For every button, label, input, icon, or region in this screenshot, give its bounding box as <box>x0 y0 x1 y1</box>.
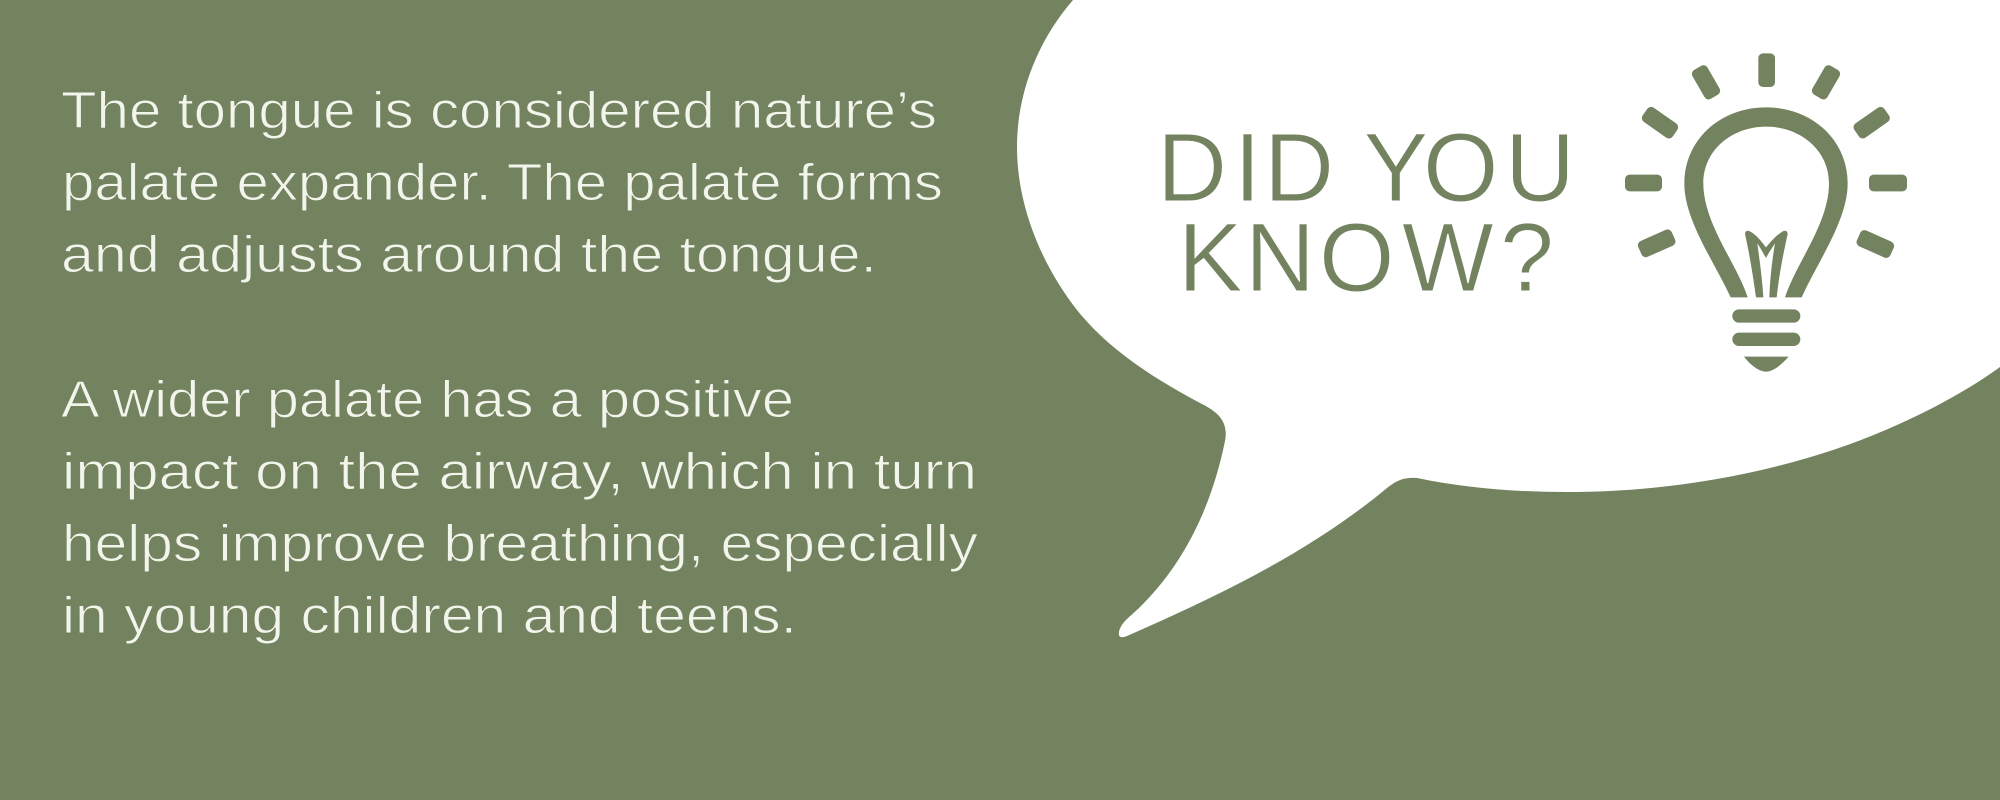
paragraph 1: palate expander. The palate forms <box>62 154 943 212</box>
paragraph 2: A wider palate has a positive <box>61 371 794 429</box>
body text <box>61 82 978 645</box>
icon: light rays <box>1625 53 1907 259</box>
did you know heading <box>1157 113 1575 312</box>
icon: bulb glass <box>1684 107 1848 297</box>
paragraph 2: impact on the airway, which in turn <box>62 443 977 501</box>
paragraph 1 <box>61 82 943 284</box>
icon: bulb base <box>1732 309 1800 372</box>
paragraph 2: helps improve breathing, especially <box>62 515 978 573</box>
icon: filament <box>1745 231 1788 297</box>
did you know heading: KNOW? <box>1178 203 1554 312</box>
paragraph 2 <box>61 371 978 645</box>
paragraph 2: in young children and teens. <box>62 587 797 645</box>
icon: light bulb <box>1625 53 1907 372</box>
speech bubble <box>1017 0 2000 637</box>
paragraph 1: The tongue is considered nature’s <box>61 82 937 140</box>
did you know heading: DID YOU <box>1157 113 1575 222</box>
paragraph 1: and adjusts around the tongue. <box>61 226 877 284</box>
